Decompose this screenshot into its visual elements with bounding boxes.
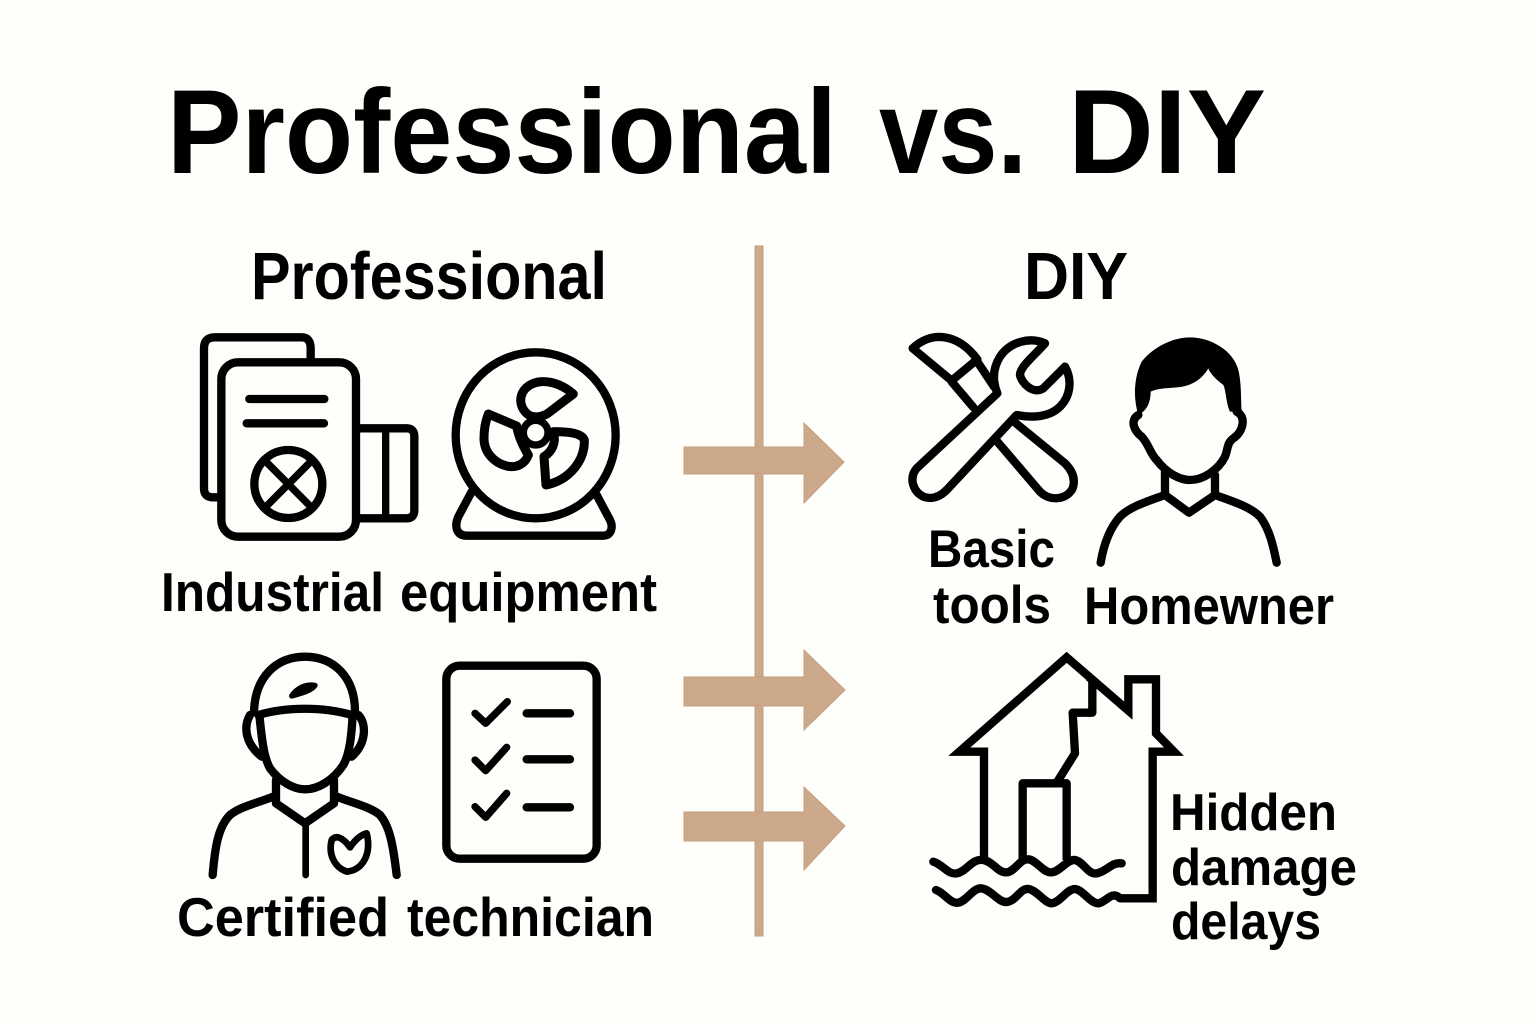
- center divider and arrows: [684, 246, 845, 936]
- label: Certified technician: [177, 886, 654, 948]
- icon: homeowner: [1101, 337, 1277, 563]
- label: Certified technician: technician: [407, 886, 654, 948]
- title: Professional: [167, 65, 837, 199]
- panel: professional: [161, 239, 657, 948]
- label: Industrial equipment: equipment: [400, 561, 657, 623]
- label: Basic tools: tools: [933, 576, 1051, 635]
- label: Certified technician: Certified: [177, 886, 389, 948]
- title: [167, 65, 1266, 199]
- label: Hidden damage delays: Hidden: [1170, 784, 1337, 842]
- icon: equipment unit: [204, 337, 414, 537]
- label: Basic tools: Basic: [928, 520, 1055, 579]
- icon: certified technician: [213, 657, 397, 875]
- heading: Professional: Professional: [251, 239, 607, 314]
- label: Basic tools: [928, 520, 1055, 635]
- label: Hidden damage delays: damage: [1171, 839, 1357, 897]
- label: Hidden damage delays: [1170, 784, 1357, 951]
- label: Industrial equipment: Industrial: [161, 561, 384, 623]
- icon: checklist: [446, 666, 597, 859]
- title: DIY: [1068, 65, 1266, 199]
- icon: flooded cracked house: [933, 657, 1174, 903]
- vertical divider: [755, 246, 763, 936]
- label: Industrial equipment: [161, 561, 657, 623]
- arrow: middle: [684, 650, 845, 730]
- arrow: bottom: [684, 787, 845, 870]
- label: Homewner: Homewner: [1084, 577, 1334, 636]
- label: Hidden damage delays: delays: [1171, 893, 1321, 951]
- title: vs.: [879, 65, 1027, 199]
- panel: DIY: [912, 239, 1357, 951]
- icon: fan: [456, 352, 616, 536]
- icon: basic tools: [912, 337, 1074, 498]
- arrow: top: [684, 423, 844, 503]
- heading: DIY: DIY: [1024, 239, 1128, 314]
